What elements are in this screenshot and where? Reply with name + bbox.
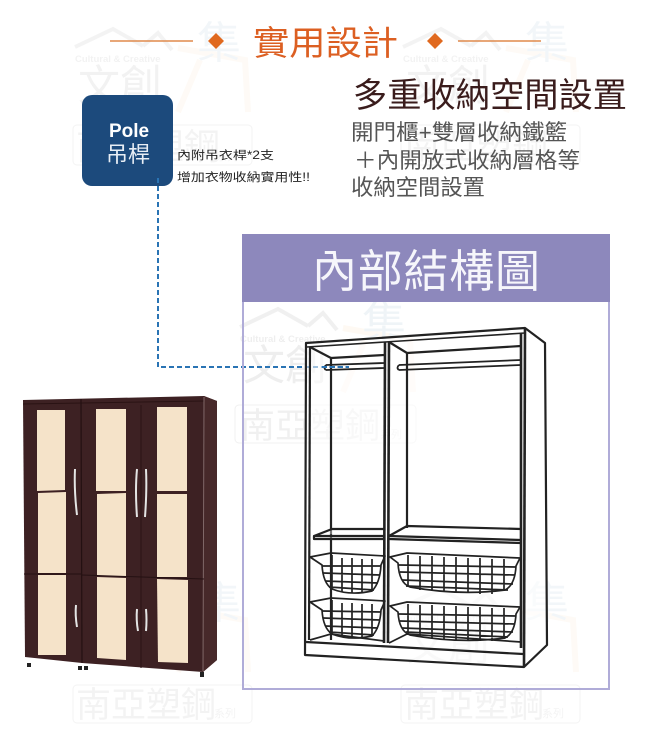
text block: storage description [351,120,580,200]
watermark: bottom left: 集 [197,579,241,628]
text block: storage description: 收納空間設置 [351,175,485,200]
heading: 多重收納空間設置: 多重收納空間設置 [353,77,627,115]
watermark: top right: 文創 [406,62,490,109]
panel header: 內部結構圖 [242,234,610,302]
text block: storage description: ＋內開放式收納層格等 [354,148,580,173]
wardrobe photo [23,396,217,677]
text block: pole description: 增加衣物收納實用性!! [177,170,310,184]
shelves [314,529,384,539]
watermark: top left: 南亞塑鋼 [76,126,220,167]
hanging rails [326,363,384,370]
watermark: top right: 集 [525,19,569,68]
wardrobe line drawing [305,328,547,667]
watermark: bottom left: 南亞塑鋼 [76,686,216,725]
wardrobe body [23,396,217,672]
title: 實用設計 with ornaments [110,25,541,63]
text block: storage description: 開門櫃+雙層收納鐵籃 [351,120,567,145]
left lower basket [310,598,385,641]
watermark: top right: 南亞塑鋼 [404,126,548,167]
watermark: bottom right: Cultural & Creative [403,614,489,625]
watermark: top left [73,19,252,167]
badge: Pole 吊桿: 吊桿 [106,142,150,167]
watermark: top left: Cultural & Creative [75,54,161,65]
watermark: bottom left [73,579,252,725]
watermark: bottom right: 集 [525,579,569,628]
left compartment back edges [310,347,331,640]
watermark: bottom right [401,579,580,725]
watermark: top right [401,19,580,167]
watermark: middle: 系列 [380,428,402,441]
panel header: 內部結構圖: 內部結構圖 [312,246,540,297]
watermark: middle: 集 [362,299,406,348]
dashed connector line from pole badge to hanging rail [158,178,348,367]
right upper basket [390,553,520,594]
text block: pole description [177,148,310,184]
watermark: top left: 集 [197,19,241,68]
left upper basket [310,553,385,593]
watermark: top right: Cultural & Creative [403,54,489,65]
light door panels [37,407,188,663]
watermark: top left: 文創 [78,62,162,109]
watermark: middle: 南亞塑鋼 [240,407,380,446]
outer frame [305,328,547,667]
centre divider [384,342,385,643]
dashed connector end over rail [322,366,349,368]
title: 實用設計 with ornaments: 實用設計 [253,25,398,63]
text block: pole description: 內附吊衣桿*2支 [177,148,275,162]
panel: interior structure [242,234,610,689]
feet [27,663,204,677]
watermark: bottom right: 系列 [542,707,564,720]
watermark: bottom left: 系列 [214,707,236,720]
watermark: top left: 系列 [216,150,238,163]
watermark: middle: Cultural & Creative [240,334,326,345]
watermark: bottom right: 文創 [406,622,490,669]
watermark: middle [235,299,416,446]
right lower basket [389,602,521,643]
watermark: middle: 文創 [243,342,327,389]
badge: Pole 吊桿 [82,95,173,186]
badge: Pole 吊桿: Pole [109,121,149,142]
bottom plinth [306,642,523,654]
handles [75,469,146,631]
watermark: bottom right: 南亞塑鋼 [404,686,544,725]
